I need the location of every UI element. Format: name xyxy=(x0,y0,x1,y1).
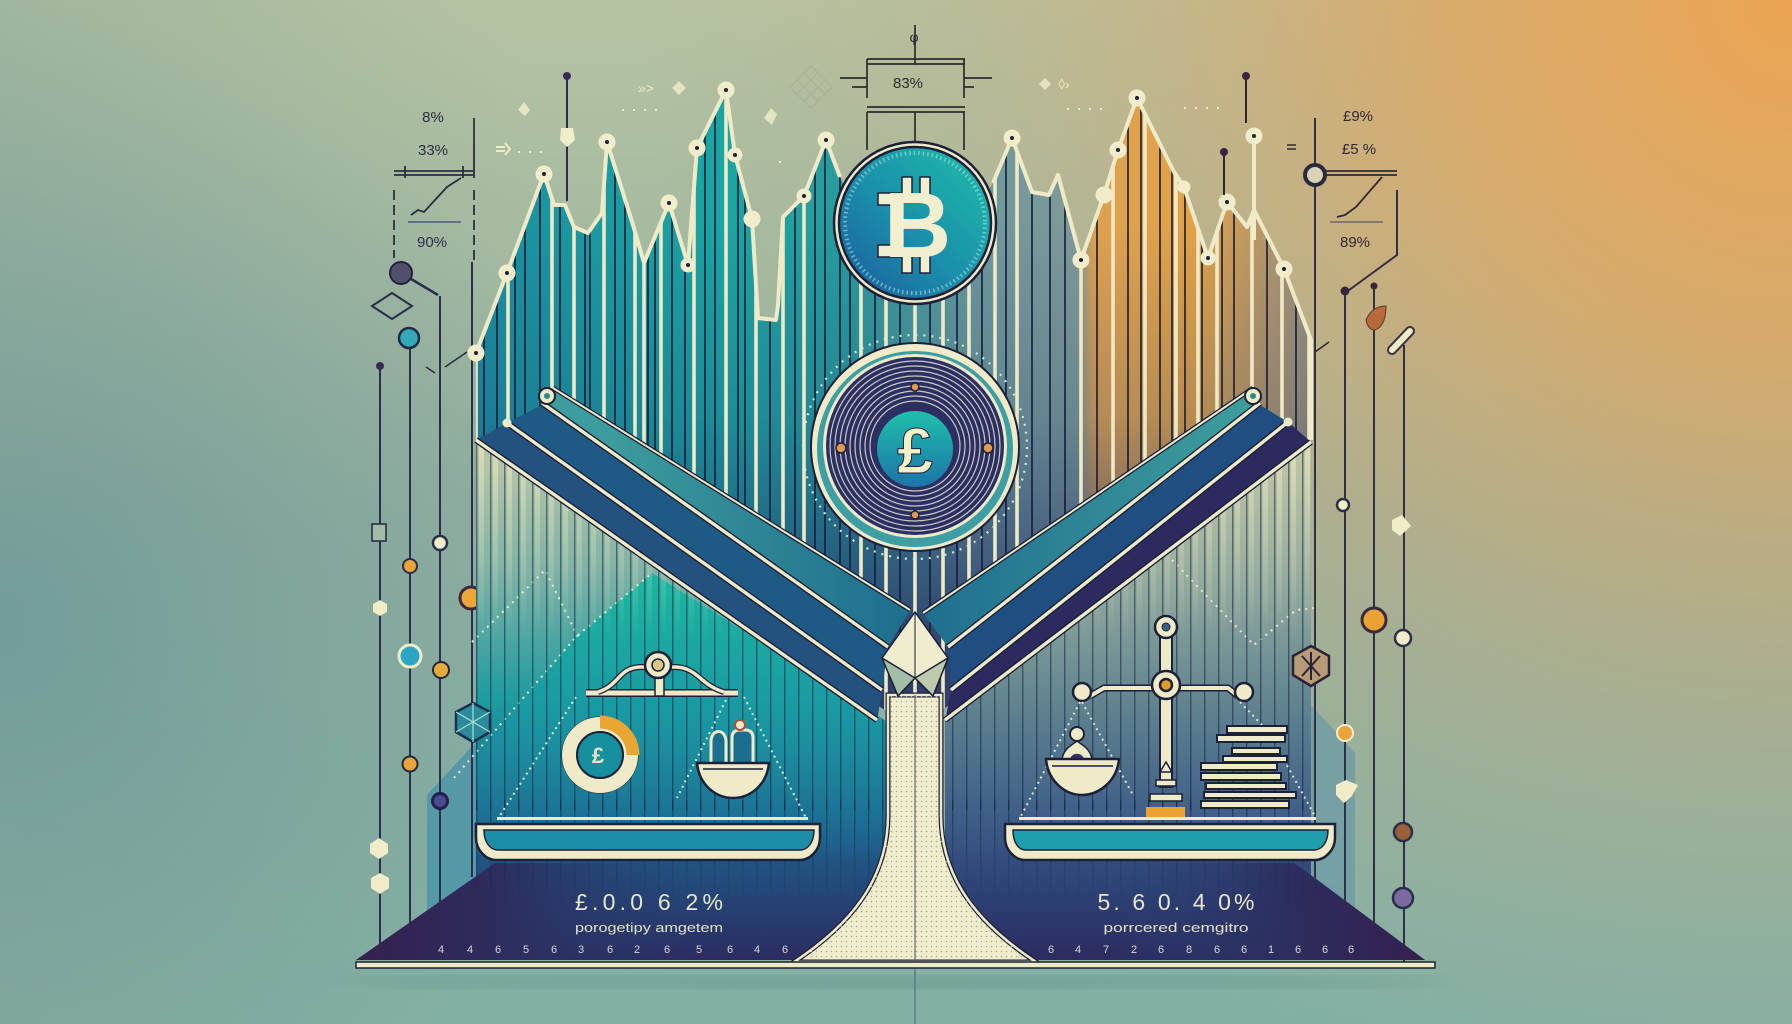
tray xyxy=(476,824,820,860)
bracket line xyxy=(1315,171,1397,175)
icon: orange dot top xyxy=(403,559,417,573)
right tick digits: 6 xyxy=(1214,944,1220,956)
left tall pin xyxy=(560,72,575,201)
label: 8% xyxy=(422,109,444,126)
hinge circles xyxy=(1073,671,1253,701)
teal mountain shape xyxy=(476,573,887,880)
left tick digits: 4 xyxy=(438,944,444,956)
icon: purple marker xyxy=(1393,888,1413,908)
icon: diamond outline xyxy=(372,293,412,319)
divider xyxy=(1330,221,1383,223)
left tick digits: 3 xyxy=(578,944,584,956)
icon: pill xyxy=(1392,331,1410,350)
bitcoin letter: B xyxy=(884,173,951,277)
person in bowl xyxy=(1062,727,1092,759)
left tick digits: 6 xyxy=(782,944,788,956)
hatch xyxy=(790,66,832,108)
bitcoin coin xyxy=(834,142,996,304)
icon: cream badge lower xyxy=(1336,780,1358,803)
icon: leaf xyxy=(1366,306,1386,330)
tray xyxy=(1005,824,1335,860)
icon: cream badges xyxy=(370,838,389,894)
connector line xyxy=(1345,190,1397,293)
right tick digits: 2 xyxy=(1131,944,1137,956)
left tick digits xyxy=(438,944,788,956)
panel: lower right slate area xyxy=(945,440,1425,960)
concentric rings xyxy=(830,361,1000,531)
bowl with items xyxy=(697,720,769,798)
icon: dark dots xyxy=(1340,282,1378,296)
right V ribbon xyxy=(923,388,1311,722)
coin studs xyxy=(836,383,993,519)
ribbon end caps xyxy=(502,388,555,428)
icon: brown marker xyxy=(1394,823,1412,841)
panel: base right corner xyxy=(1120,863,1425,960)
centre disc xyxy=(877,411,953,487)
ribbon end caps xyxy=(1245,388,1292,426)
icon: teal circle marker xyxy=(399,328,419,348)
post xyxy=(1155,616,1177,787)
right chevrons: ◊› xyxy=(1058,76,1070,92)
left tick digits: 6 xyxy=(607,944,613,956)
right tick digits: 1 xyxy=(1268,944,1274,956)
icon: left rail pin xyxy=(390,262,438,295)
top centre bracket xyxy=(840,25,992,150)
right stat value: 5. 6 0. 4 0% xyxy=(1098,889,1254,915)
hexagon icon right xyxy=(1293,646,1329,686)
icon: orange glow marker xyxy=(1362,608,1386,632)
label: 83% xyxy=(893,75,923,92)
right stat caption: porrcered cemgitro xyxy=(1104,920,1248,935)
panel: base left corner xyxy=(356,863,690,960)
top-right annotation block xyxy=(1287,108,1397,352)
dotted mountain lines xyxy=(454,570,652,778)
donut chart icon xyxy=(567,722,633,788)
tick and equals xyxy=(1287,145,1329,352)
right side annotation rails xyxy=(1315,118,1413,965)
beam xyxy=(1090,688,1238,696)
dashed sides xyxy=(394,190,474,262)
cream diamonds xyxy=(518,78,1051,125)
right tick digits xyxy=(1048,944,1354,956)
left tick digits: 4 xyxy=(467,944,473,956)
icon: cream ring marker lower xyxy=(1395,630,1411,646)
bracket lines xyxy=(394,118,474,178)
left stat caption: porogetipy amgetem xyxy=(575,920,723,935)
icon: dark dot xyxy=(376,362,384,370)
divider xyxy=(408,221,461,223)
right tick digits: 7 xyxy=(1103,944,1109,956)
left tick digits: 5 xyxy=(696,944,702,956)
bracket frame xyxy=(840,25,992,150)
left tick digits: 6 xyxy=(727,944,733,956)
post base xyxy=(1146,762,1185,818)
icon: cream badge xyxy=(373,600,387,616)
left tick digits: 2 xyxy=(634,944,640,956)
left tick digits: 5 xyxy=(523,944,529,956)
right tick digits: 6 xyxy=(1322,944,1328,956)
left tick digits: 6 xyxy=(551,944,557,956)
mini trend line xyxy=(411,178,461,215)
icon: small square xyxy=(372,524,386,541)
top-left annotation block xyxy=(394,109,474,373)
decorative pins and dots xyxy=(496,66,1250,201)
bitcoin symbol stubs xyxy=(878,177,930,273)
label: 90% xyxy=(417,234,447,251)
left tick digits: 6 xyxy=(664,944,670,956)
pound glyph: £ xyxy=(897,415,933,487)
pale blue strip left xyxy=(427,742,476,915)
stem of the scale xyxy=(794,695,1036,1024)
left V ribbon xyxy=(476,388,910,722)
icon: cream ring marker xyxy=(1337,499,1349,511)
icon: orange glow marker xyxy=(460,587,482,609)
icon: orange dot lower xyxy=(402,756,418,772)
pale blue strip right xyxy=(1311,705,1355,910)
dotted pan strings xyxy=(499,697,806,818)
lower panel stripes xyxy=(476,444,1310,880)
short tick marks xyxy=(426,352,467,373)
shelf top plate xyxy=(1019,817,1316,820)
ring marker xyxy=(1305,165,1325,185)
left tick digits: 6 xyxy=(495,944,501,956)
label: 89% xyxy=(1340,234,1370,251)
chart peak marker centres xyxy=(474,88,1286,355)
icon: orange dot xyxy=(1337,725,1353,741)
stack of books xyxy=(1201,726,1296,808)
right tick digits: 6 xyxy=(1048,944,1054,956)
label: £9% xyxy=(1343,108,1373,125)
pound coin xyxy=(803,335,1027,559)
hexagon icon left xyxy=(456,703,490,742)
left tick digits: 4 xyxy=(754,944,760,956)
right tick digits: 8 xyxy=(1186,944,1192,956)
left stat value: £.0.0 6 2% xyxy=(575,889,723,915)
right balance scale xyxy=(1005,616,1335,860)
panel: lower left teal area xyxy=(356,440,887,960)
right tick digits: 6 xyxy=(1348,944,1354,956)
left side annotation rails xyxy=(370,262,482,955)
chart: mirrored price area chart xyxy=(468,80,1320,740)
right tick digits: 6 xyxy=(1241,944,1247,956)
chart top outline xyxy=(476,90,1311,440)
icon: cream ring marker xyxy=(433,536,447,550)
label: £5 % xyxy=(1342,141,1376,158)
dot rows xyxy=(518,108,1226,162)
chart pillar xyxy=(1252,136,1256,240)
donut chart icon: £ xyxy=(592,743,605,768)
right tall pins xyxy=(1220,72,1250,195)
right tick digits: 4 xyxy=(1075,944,1081,956)
base line xyxy=(335,962,1455,988)
pivot xyxy=(645,652,671,696)
label: 33% xyxy=(418,142,448,159)
glyph: φ xyxy=(909,29,919,45)
shelf top plate xyxy=(497,817,808,820)
dotted right peak line xyxy=(1172,560,1314,645)
icon: blue circle marker xyxy=(399,645,421,667)
right tick digits: 6 xyxy=(1295,944,1301,956)
dotted pan strings xyxy=(1020,702,1316,818)
right tick digits: 6 xyxy=(1158,944,1164,956)
cream chevrons: »> xyxy=(638,80,654,96)
small arrow xyxy=(496,143,510,155)
chart fill xyxy=(470,80,1320,740)
bowl xyxy=(1046,759,1119,795)
chart peak markers xyxy=(468,82,1292,361)
icon: cream badge xyxy=(1392,515,1411,536)
gem at the joint xyxy=(882,612,948,696)
icon: purple ring xyxy=(432,794,448,808)
mini trend line xyxy=(1337,177,1382,217)
icon: orange dot middle xyxy=(433,662,449,678)
beam xyxy=(586,667,738,693)
left balance scale xyxy=(476,652,820,860)
